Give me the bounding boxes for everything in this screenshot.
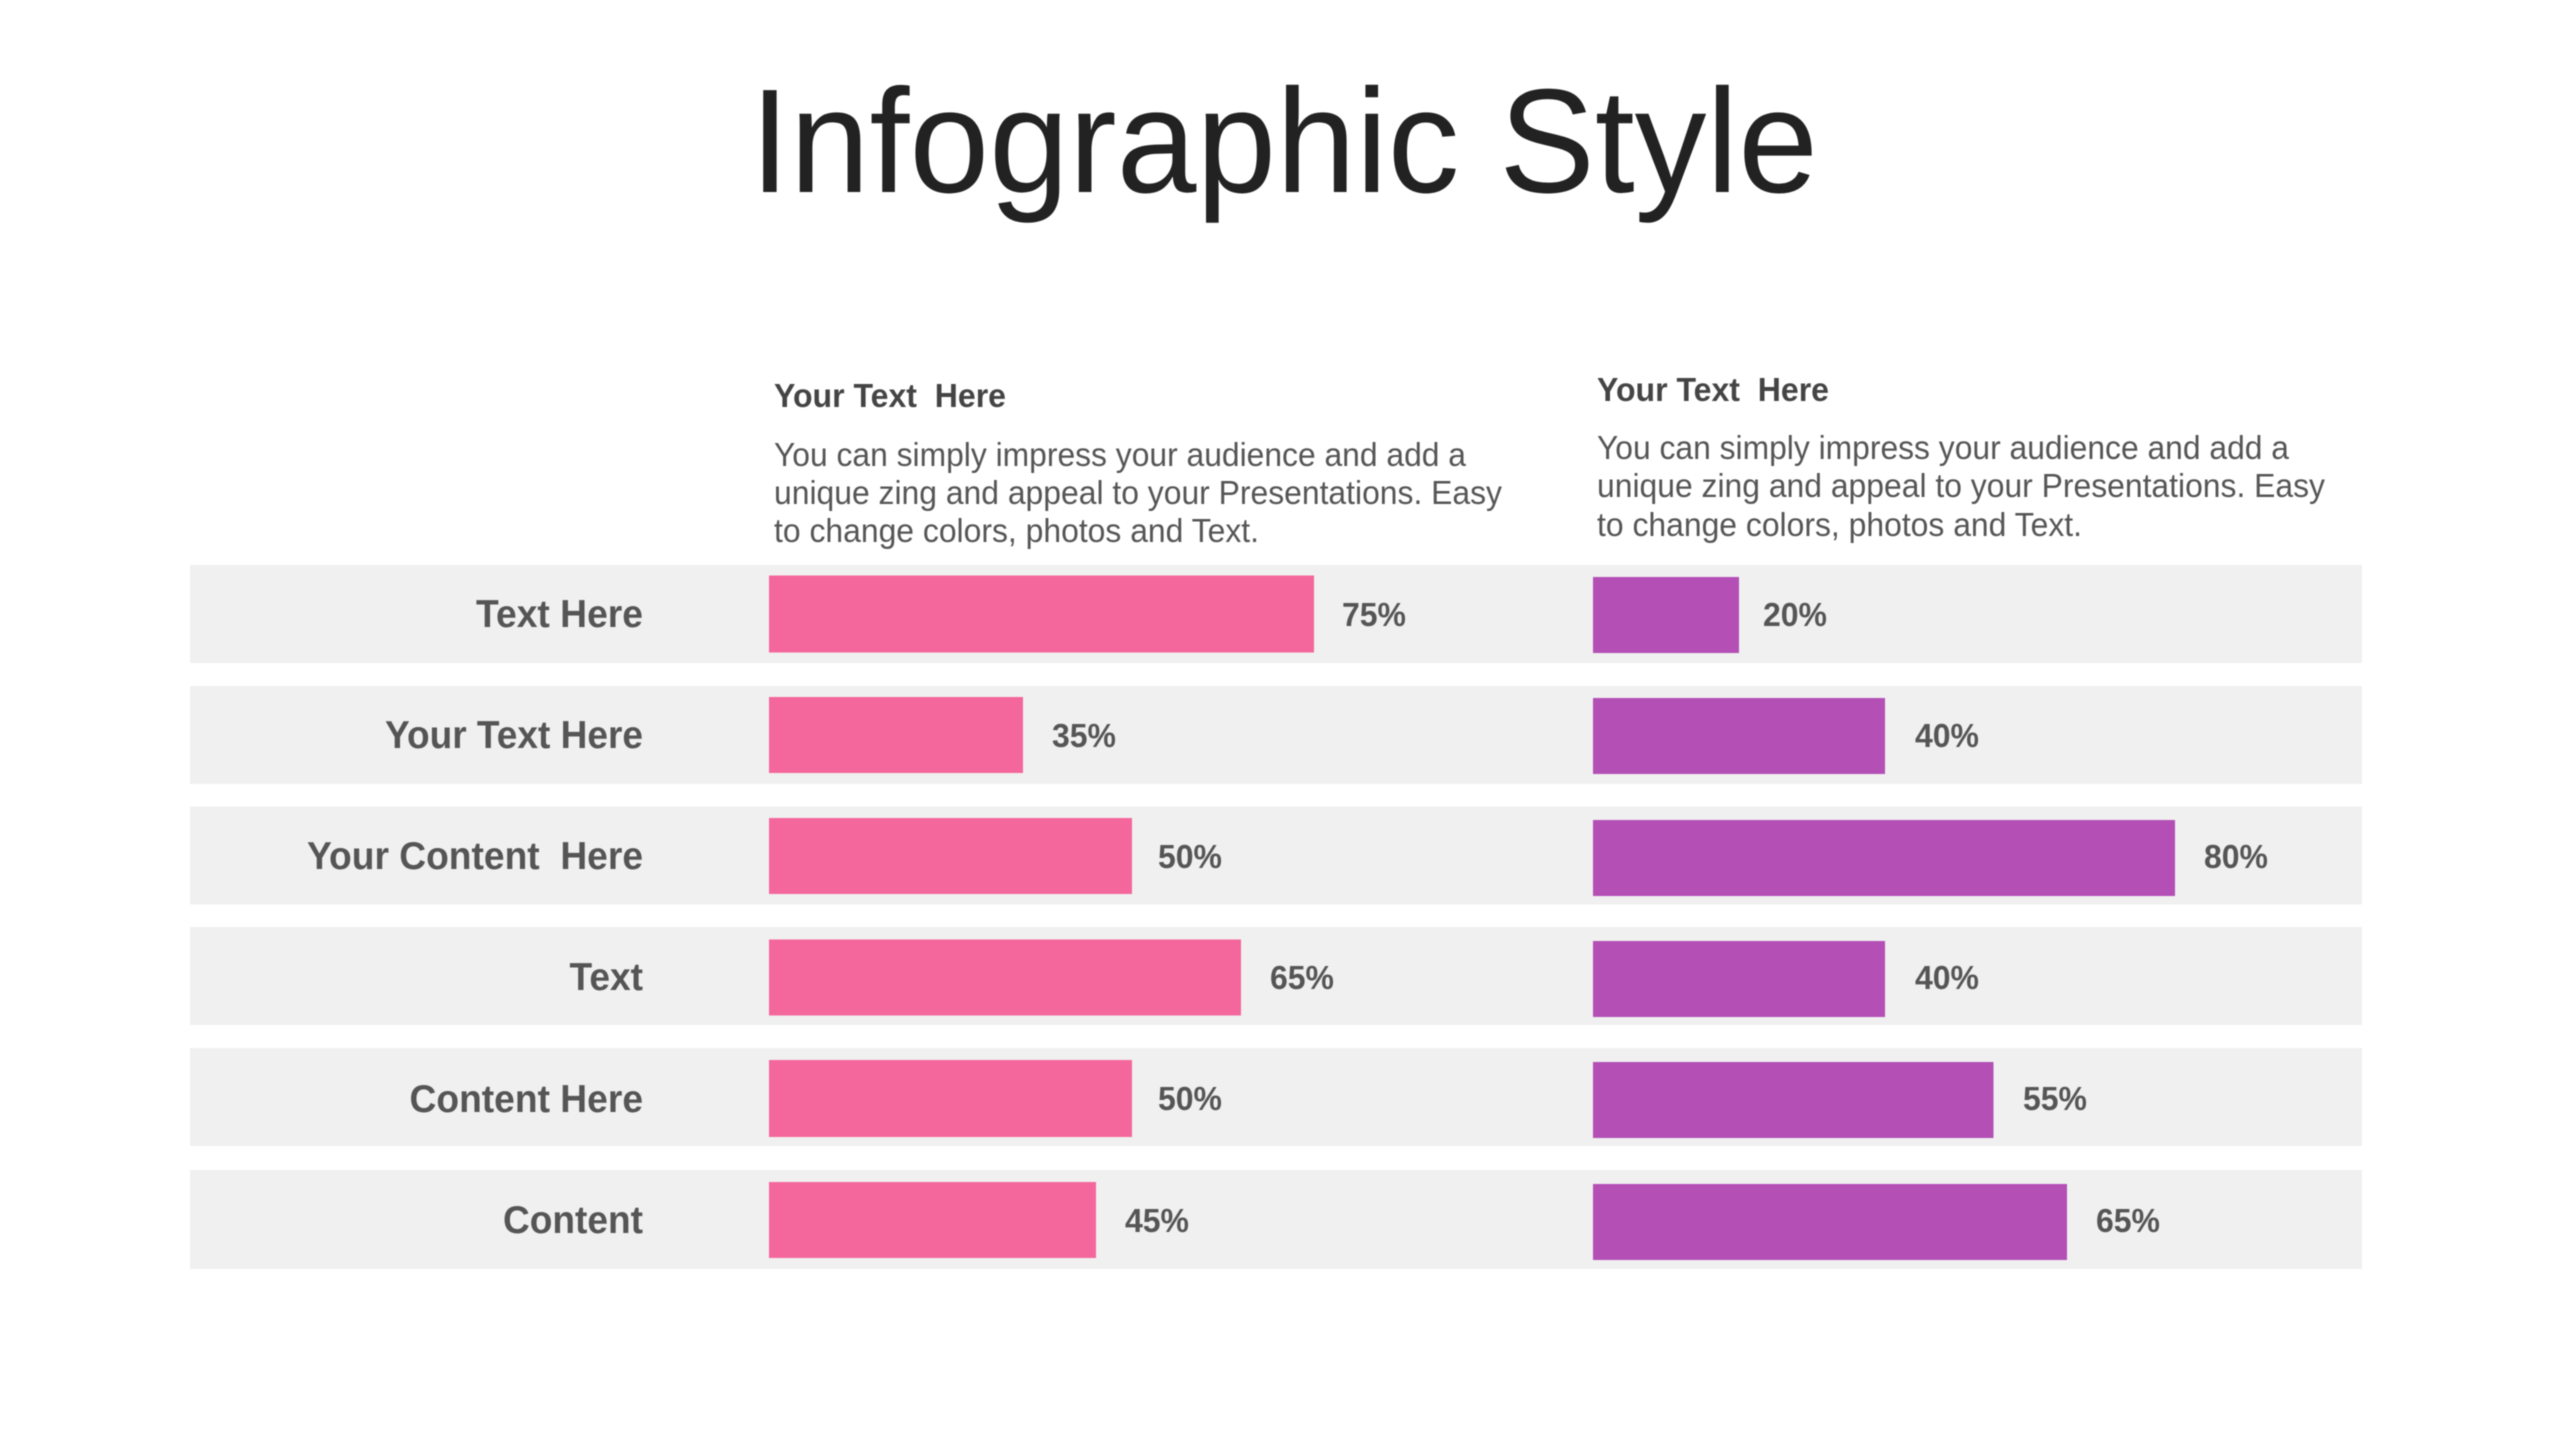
left column body: You can simply impress your audience and add a [774,436,1467,473]
row label: Text [570,956,643,999]
purple bar 40% [1593,698,1885,774]
purple bar 40% [1593,941,1885,1017]
right column body: unique zing and appeal to your Presentations. Easy [1597,467,2325,504]
row 2: Your Text Here [190,686,2362,784]
purple bar 55% [1593,1062,1994,1138]
left column body [774,436,1502,549]
purple value: 20% [1763,596,1827,633]
right column body: You can simply impress your audience and add a [1597,429,2290,466]
left column heading: Your Text Here [774,377,1006,414]
title: Infographic Style [750,59,1818,224]
row 5: Content Here [190,1048,2362,1146]
purple value: 40% [1915,959,1979,996]
purple bar 20% [1593,577,1739,653]
pink value: 65% [1270,959,1334,996]
pink bar 45% [769,1182,1096,1258]
pink bar 75% [769,576,1314,652]
row label: Content Here [410,1078,643,1121]
pink value: 45% [1125,1202,1189,1239]
row label: Your Text Here [385,714,643,757]
pink bar 50% [769,1060,1132,1137]
row 3: Your Content Here [190,806,2362,904]
right column heading: Your Text Here [1597,371,1829,408]
right column body: to change colors, photos and Text. [1597,506,2082,543]
pink value: 50% [1158,838,1222,875]
pink value: 75% [1342,596,1406,633]
row label: Your Content Here [307,835,643,878]
pink bar 50% [769,818,1132,894]
row 1: Text Here [190,565,2362,663]
row 4: Text [190,927,2362,1025]
purple value: 55% [2023,1080,2087,1117]
purple value: 65% [2096,1202,2160,1239]
right column body [1597,429,2325,543]
left column body: to change colors, photos and Text. [774,512,1259,549]
purple bar 80% [1593,820,2175,896]
purple bar 65% [1593,1184,2067,1260]
pink value: 50% [1158,1080,1222,1117]
left column body: unique zing and appeal to your Presentations. Easy [774,474,1502,511]
pink bar 35% [769,697,1023,773]
text block: right column intro [1597,371,2325,543]
pink bar 65% [769,940,1241,1016]
row 6: Content [190,1170,2362,1269]
text block: left column intro [774,377,1502,549]
purple value: 40% [1915,717,1979,754]
purple value: 80% [2204,838,2268,875]
row label: Content [503,1199,643,1242]
pink value: 35% [1052,717,1116,754]
row label: Text Here [476,593,643,636]
